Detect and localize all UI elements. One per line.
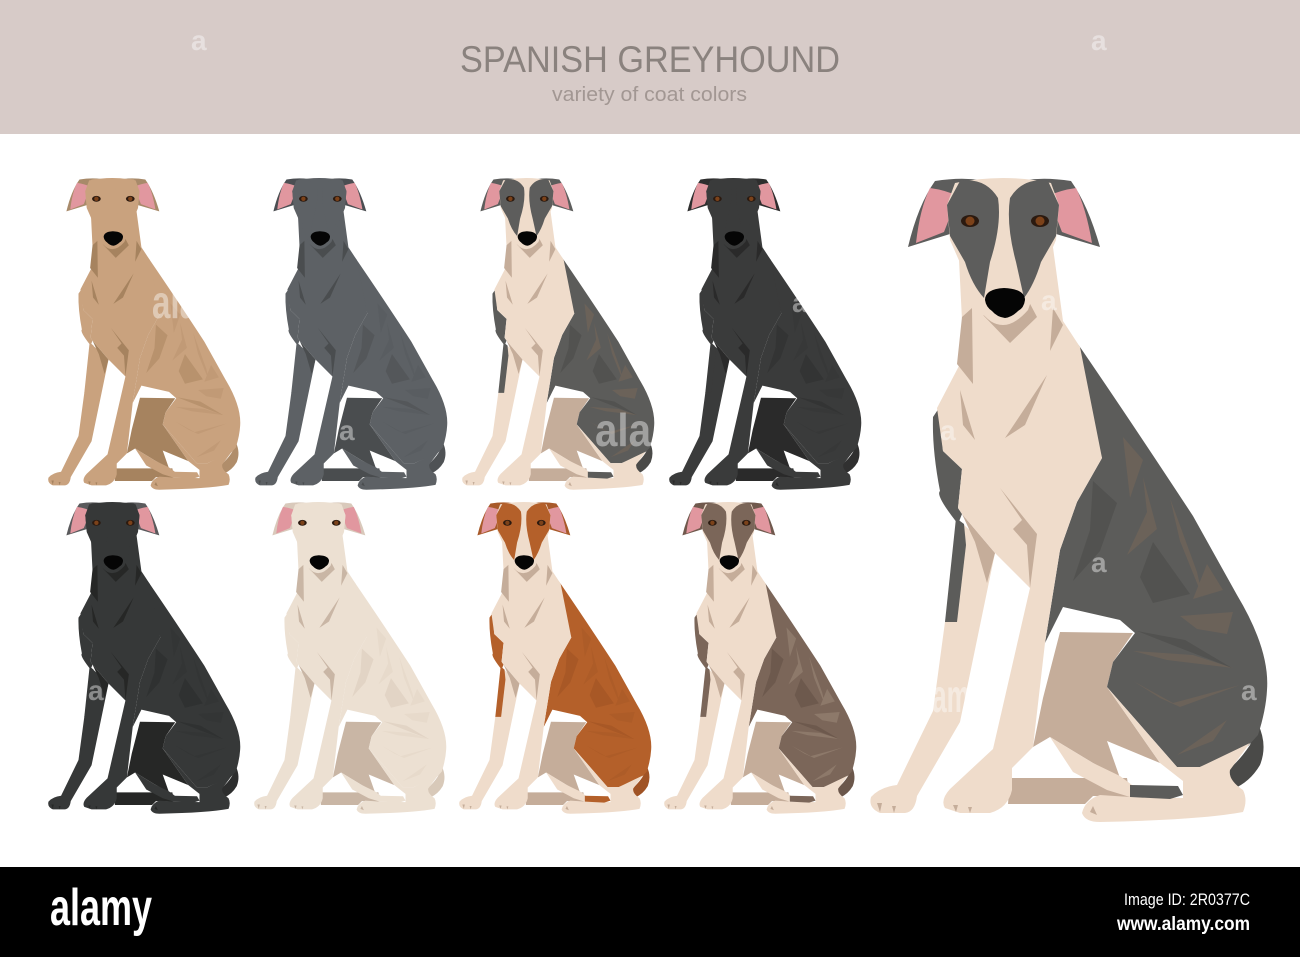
watermarks: a — [1041, 285, 1057, 316]
watermarks: ala — [152, 276, 198, 328]
header band — [0, 0, 1300, 134]
dog: fawn — [48, 178, 240, 490]
subtitle: variety of coat colors — [552, 84, 747, 106]
dog: black — [669, 178, 861, 490]
watermarks: am — [932, 670, 970, 722]
watermarks: a — [339, 415, 355, 446]
website: www.alamy.com — [1116, 914, 1250, 935]
watermarks: a — [940, 415, 956, 446]
footer bar — [0, 867, 1300, 957]
watermarks: a — [191, 25, 207, 56]
watermarks: a — [792, 287, 808, 318]
dog: blue brindle pied — [462, 178, 654, 490]
watermarks: a — [88, 675, 104, 706]
title: SPANISH GREYHOUND — [460, 39, 840, 80]
image id: Image ID: 2R0377C — [1124, 890, 1250, 909]
alamy logo: alamy — [50, 879, 152, 937]
dog: red pied — [459, 502, 651, 814]
dog: cream — [254, 502, 446, 814]
watermarks: a — [1241, 675, 1257, 706]
dog: blue — [255, 178, 447, 490]
watermarks: a — [1091, 25, 1107, 56]
dog: brown brindle pied — [664, 502, 856, 814]
dog: large blue brindle pied — [870, 178, 1267, 822]
watermarks: ala — [595, 404, 651, 456]
watermarks: a — [1091, 547, 1107, 578]
watermarks — [88, 25, 1257, 722]
dog: charcoal — [48, 502, 240, 814]
